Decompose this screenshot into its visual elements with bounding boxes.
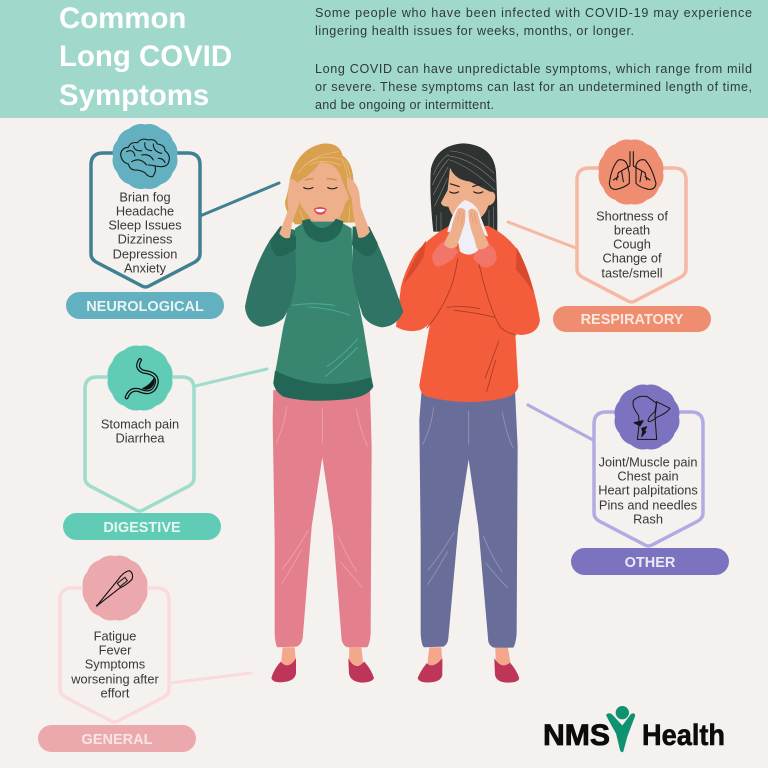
intro text: Long COVID can have unpredictable symptoms, which range from mild <box>315 62 752 76</box>
title: Long COVID <box>59 40 232 73</box>
panel: general <box>38 556 251 752</box>
intro text: Some people who have been infected with COVID-19 may experience <box>315 6 752 20</box>
label pill <box>38 725 196 752</box>
arms <box>279 177 370 238</box>
logo: NMS Health: NMS <box>543 719 610 752</box>
tissue and hands <box>444 200 489 255</box>
symptoms: Pins and needles <box>599 498 697 513</box>
symptoms: Joint/Muscle pain <box>599 455 697 470</box>
connector line <box>170 673 251 683</box>
symptoms: Rash <box>633 512 663 527</box>
logo: NMS Health <box>543 706 725 752</box>
intro text: lingering health issues for weeks, months, or longer. <box>315 24 634 38</box>
symptoms: Chest pain <box>617 469 679 484</box>
logo: NMS Health: Health <box>642 719 725 752</box>
icon: lungs <box>609 152 656 189</box>
trousers: pink <box>271 390 374 683</box>
head and hair <box>430 143 497 232</box>
badge <box>113 124 177 189</box>
badge <box>108 346 172 410</box>
head and hair <box>285 143 355 233</box>
symptoms: Shortness of <box>596 209 668 224</box>
panel: other <box>528 385 729 575</box>
symptoms: breath <box>614 223 650 238</box>
frame <box>594 412 703 546</box>
symptoms: Depression <box>113 247 177 262</box>
symptoms: Stomach pain <box>101 417 179 432</box>
trousers: blue <box>418 390 519 683</box>
figure: woman with tissue <box>396 143 540 683</box>
label pill: GENERAL <box>82 732 153 748</box>
symptoms: Symptoms <box>85 657 145 672</box>
symptoms <box>596 209 668 281</box>
icon: torso <box>633 396 670 439</box>
symptoms: Heart palpitations <box>598 483 698 498</box>
badge <box>599 140 663 204</box>
frame <box>60 588 169 722</box>
icon: brain <box>121 139 169 177</box>
symptoms: Brian fog <box>119 190 171 205</box>
header band <box>0 0 768 118</box>
collar <box>302 219 343 242</box>
figure: woman holding head <box>245 143 403 683</box>
left sleeve <box>396 226 458 331</box>
symptoms: Dizziness <box>118 232 172 247</box>
symptoms: effort <box>101 686 130 701</box>
symptoms <box>70 629 159 701</box>
symptoms: Diarrhea <box>115 431 165 446</box>
sleeves <box>245 226 296 327</box>
symptoms: Sleep Issues <box>108 218 182 233</box>
frame <box>85 377 194 511</box>
intro text: and be ongoing or intermittent. <box>315 98 494 112</box>
label pill: OTHER <box>625 555 676 571</box>
panel: digestive <box>63 346 267 540</box>
badge <box>615 385 679 449</box>
sweater body <box>273 222 373 387</box>
hem <box>273 371 373 401</box>
intro text <box>315 6 752 112</box>
symptoms <box>598 455 698 527</box>
frame <box>91 153 200 287</box>
symptoms <box>108 190 182 276</box>
symptoms <box>101 417 179 446</box>
symptoms: Headache <box>116 204 174 219</box>
connector line <box>508 222 576 248</box>
title: Common <box>59 2 186 35</box>
title: Symptoms <box>59 79 209 112</box>
label pill <box>571 548 729 575</box>
connector line <box>200 183 279 216</box>
intro text: or severe. These symptoms can last for an undetermined length of time, <box>315 80 752 94</box>
connector line <box>528 405 593 440</box>
logo figure <box>606 706 635 752</box>
label pill: NEUROLOGICAL <box>86 299 204 315</box>
symptoms: Anxiety <box>124 261 167 276</box>
connector line <box>195 369 267 386</box>
sweater body <box>419 226 518 402</box>
label pill <box>553 306 711 332</box>
frame <box>577 168 686 302</box>
panel: neurological <box>66 124 279 319</box>
symptoms: taste/smell <box>601 266 663 281</box>
icon: stomach <box>127 360 157 397</box>
badge <box>83 556 147 620</box>
icon: thermometer <box>96 571 133 607</box>
cuffs <box>432 239 458 267</box>
cuffs <box>271 227 296 256</box>
label pill: DIGESTIVE <box>103 520 181 536</box>
title <box>59 2 232 112</box>
symptoms: worsening after <box>70 672 159 687</box>
symptoms: Cough <box>613 237 651 252</box>
panel: respiratory <box>508 140 711 332</box>
label pill <box>63 513 221 540</box>
right sleeve <box>477 225 540 335</box>
label pill: RESPIRATORY <box>581 312 684 328</box>
symptoms: Fatigue <box>94 629 136 644</box>
label pill <box>66 292 224 319</box>
symptoms: Fever <box>99 643 132 658</box>
symptoms: Change of <box>602 251 662 266</box>
